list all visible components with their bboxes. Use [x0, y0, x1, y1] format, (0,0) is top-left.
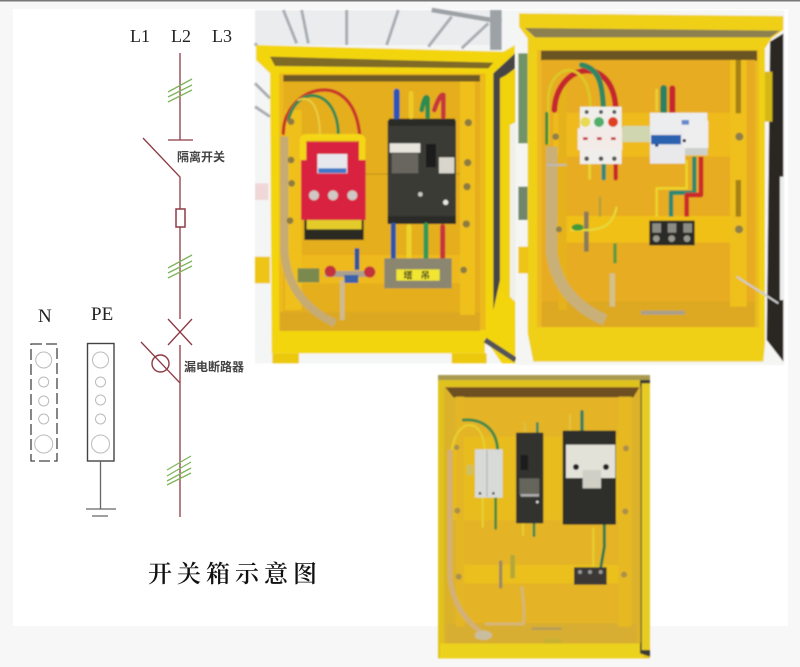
phase labels L1 L2 L3: L3 — [212, 26, 232, 46]
black leakage breaker — [388, 119, 456, 224]
cable mark: middle three-wire — [168, 255, 192, 278]
black leakage protector — [563, 431, 616, 525]
isolating switch label: 隔离开关 — [177, 149, 225, 164]
floor plate and hinge — [641, 277, 778, 313]
N label: N — [38, 306, 52, 327]
frame bolts — [287, 118, 472, 273]
neutral bar and earth cables — [284, 137, 375, 323]
earth bar and cables — [547, 147, 617, 320]
photo: switch box with red isolator — [255, 10, 517, 363]
phase labels L1 L2 L3: L2 — [171, 26, 191, 46]
surge protector modules — [578, 107, 622, 164]
white fuse switch — [467, 449, 503, 498]
miniature leakage breaker — [650, 113, 708, 164]
cabinet body — [256, 45, 517, 363]
photo: switch box with surge protector — [516, 10, 784, 365]
ground symbol — [86, 461, 116, 516]
PE terminal bar — [88, 344, 114, 461]
phase labels L1 L2 L3 — [130, 26, 232, 46]
leakage breaker circle — [152, 355, 169, 372]
terminal block with yellow tag: 塔吊 — [403, 270, 438, 281]
incoming wires — [547, 65, 672, 178]
incoming and outgoing wires — [452, 412, 604, 568]
frame bolts — [454, 445, 629, 580]
cable mark: upper three-wire — [168, 79, 192, 102]
cable mark: lower four-wire — [167, 456, 191, 485]
N terminal bar — [31, 344, 57, 461]
DIN rail — [622, 126, 651, 142]
phase labels L1 L2 L3: L1 — [130, 26, 150, 46]
wires above and below the breaker — [393, 92, 443, 258]
black breaker — [516, 433, 543, 523]
main circuit line — [141, 53, 193, 517]
fuse symbol — [176, 209, 185, 227]
black terminal block — [649, 221, 695, 245]
panel: wiring schematic — [31, 26, 244, 517]
PE label: PE — [91, 304, 113, 325]
cabinet body — [438, 375, 650, 658]
terminal block — [574, 567, 607, 585]
photo: switch box with two black breakers — [438, 375, 650, 658]
frame bolts — [552, 133, 743, 233]
title: 开关箱示意图 — [148, 560, 322, 588]
terminal block with yellow tag — [384, 258, 452, 288]
breaker cross symbol — [168, 319, 192, 345]
photo background — [255, 10, 517, 363]
red isolating switch — [301, 137, 366, 240]
incoming wires — [283, 90, 360, 138]
cabinet body — [518, 13, 784, 362]
leakage breaker label: 漏电断路器 — [184, 359, 244, 374]
earth bar and cables — [450, 450, 562, 643]
outgoing wires — [657, 157, 701, 217]
photo background — [516, 10, 784, 365]
